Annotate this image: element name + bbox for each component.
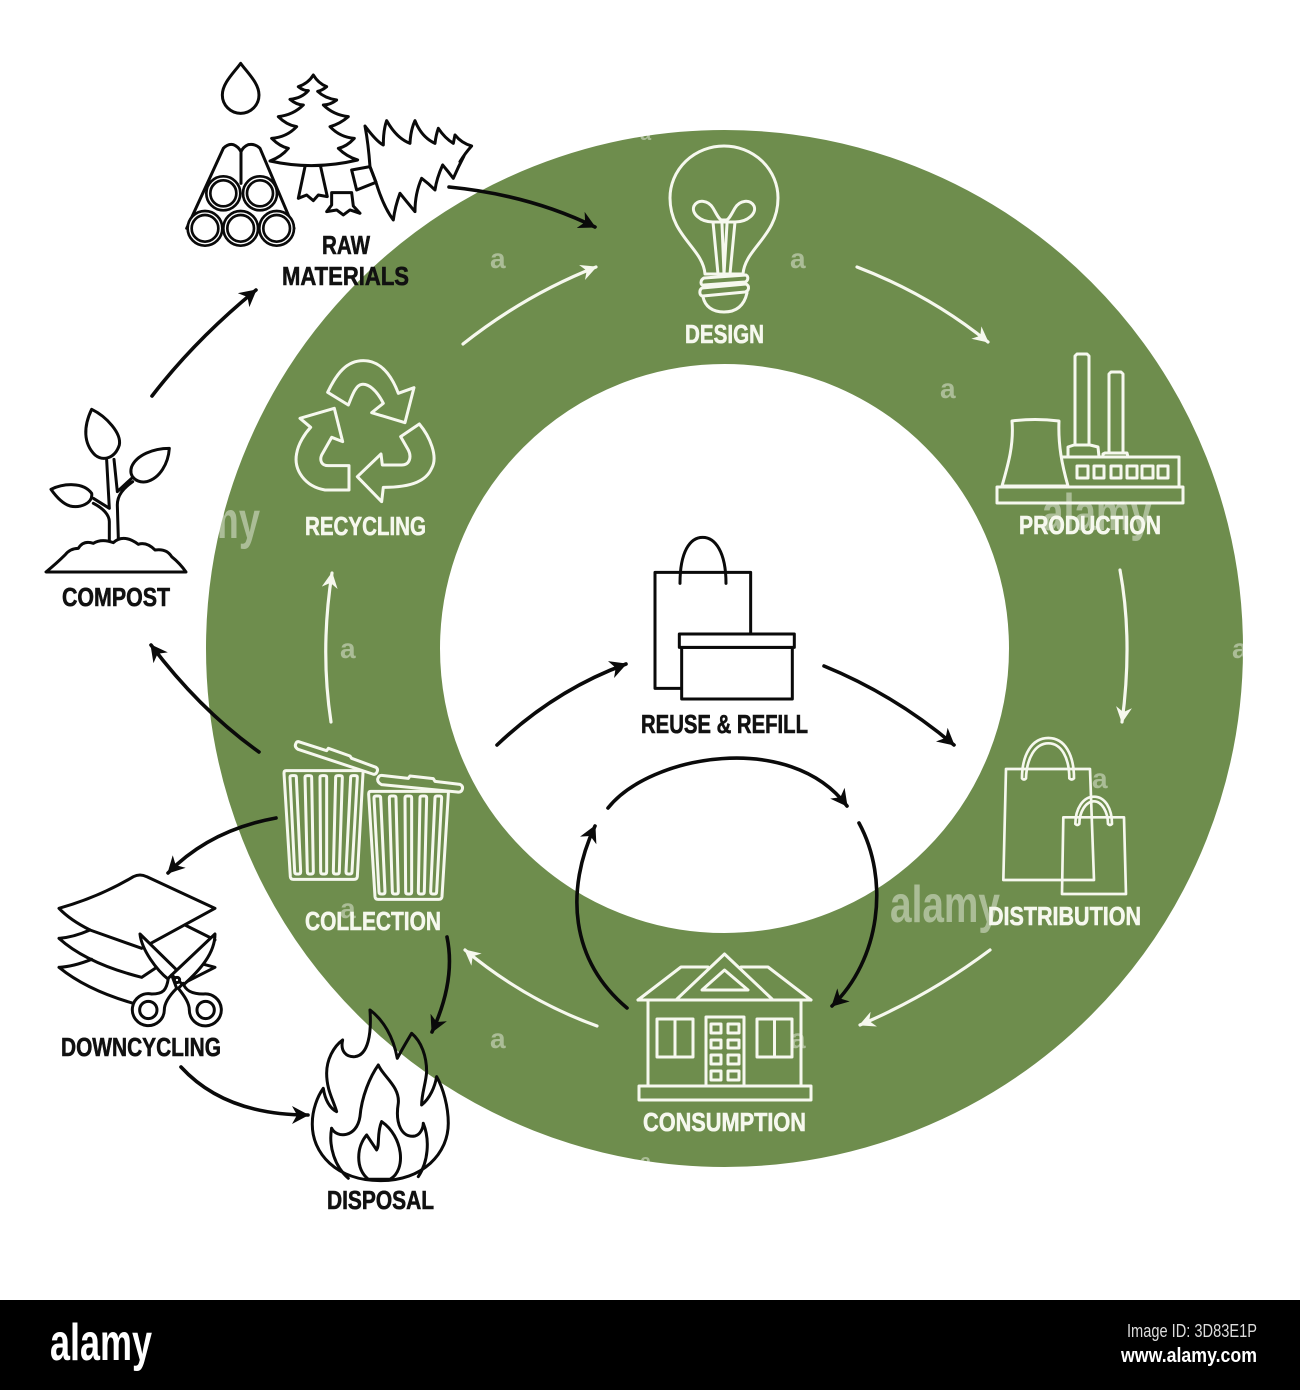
label: Collection: COLLECTION: [305, 906, 441, 936]
arrow: reuse to distribution: [824, 666, 954, 745]
watermark marks on ring: my: [205, 492, 260, 550]
arrow: inner loop left: [577, 826, 627, 1008]
label: Distribution: DISTRIBUTION: [988, 901, 1141, 931]
watermark marks on ring: [205, 123, 1248, 1173]
icon: water drop: [222, 63, 259, 113]
watermark marks on ring: a: [640, 123, 652, 145]
watermark marks on ring: a: [1092, 763, 1108, 794]
icon: fire: [312, 1010, 448, 1181]
watermark marks on ring: a: [490, 1023, 506, 1054]
icon: trash bins: [284, 742, 463, 899]
label: Compost: COMPOST: [62, 582, 170, 612]
icon: pine tree trunk: [298, 167, 327, 201]
watermark marks on ring: a: [790, 1023, 806, 1054]
icon: log pile: [187, 144, 294, 228]
watermark marks on ring: a: [340, 633, 356, 664]
icon: recycling symbol: [296, 361, 434, 502]
arrow: production to distribution: [1120, 570, 1127, 722]
label: Production: PRODUCTION: [1019, 510, 1161, 540]
label: Raw materials: RAW: [322, 230, 370, 260]
watermark marks on ring: alamy: [1042, 484, 1152, 542]
panel: green circular economy ring: [323, 247, 1126, 1050]
arrow: distribution to consumption: [860, 950, 990, 1025]
arrow: inner loop top: [608, 758, 847, 808]
icon: felled pine tree: [365, 121, 472, 220]
arrow: recycling to design: [463, 267, 596, 344]
arrow: collection to downcycling: [168, 818, 276, 873]
footer bar: [0, 1300, 1300, 1390]
icon: cut tree section: [352, 167, 376, 190]
arrow: raw materials to design: [449, 187, 595, 227]
icon: reuse bag and box: [655, 537, 794, 699]
arrow: consumption to collection: [465, 950, 597, 1026]
arrow: collection to reuse: [497, 664, 626, 745]
arrow: inner loop right: [832, 823, 877, 1006]
label: Raw materials: MATERIALS: [282, 261, 409, 291]
icon: shopping bags: [1003, 738, 1126, 894]
arrow: design to production: [857, 267, 988, 342]
footer logo: alamy: [50, 1314, 152, 1372]
label: Disposal: DISPOSAL: [327, 1185, 434, 1215]
label: Consumption: CONSUMPTION: [643, 1107, 806, 1137]
icon: house: [638, 954, 811, 1100]
label: Design: DESIGN: [685, 319, 764, 349]
watermark marks on ring: a: [1232, 633, 1248, 664]
watermark marks on ring: a: [340, 893, 356, 924]
arrow: downcycling to disposal: [181, 1067, 308, 1115]
icon: raw materials (drop, pine trees, logs): [187, 63, 472, 246]
label: Reuse and refill: REUSE & REFILL: [641, 709, 808, 739]
watermark marks on ring: a: [490, 243, 506, 274]
watermark marks on ring: a: [790, 243, 806, 274]
icon: tree stump: [327, 193, 360, 215]
icon: pine tree: [270, 75, 358, 166]
icon: compost sprout: [46, 409, 186, 572]
arrow: collection to recycling: [326, 573, 332, 722]
icon: paper sheets and scissors: [59, 875, 221, 1026]
icon: light bulb: [670, 146, 778, 312]
footer url: www.alamy.com: [1120, 1345, 1257, 1367]
arrow: collection to compost: [151, 645, 259, 752]
watermark marks on ring: a: [640, 1151, 652, 1173]
arrow: collection to disposal: [432, 937, 449, 1032]
icon: factory: [997, 354, 1183, 503]
footer image id: Image ID: 3D83E1P: [1127, 1321, 1257, 1341]
label: Recycling: RECYCLING: [305, 511, 426, 541]
arrow: compost to raw materials: [152, 290, 256, 396]
watermark marks on ring: alamy: [890, 876, 1000, 934]
label: Raw materials: [282, 230, 409, 291]
watermark marks on ring: a: [940, 373, 956, 404]
label: Downcycling: DOWNCYCLING: [61, 1032, 221, 1062]
